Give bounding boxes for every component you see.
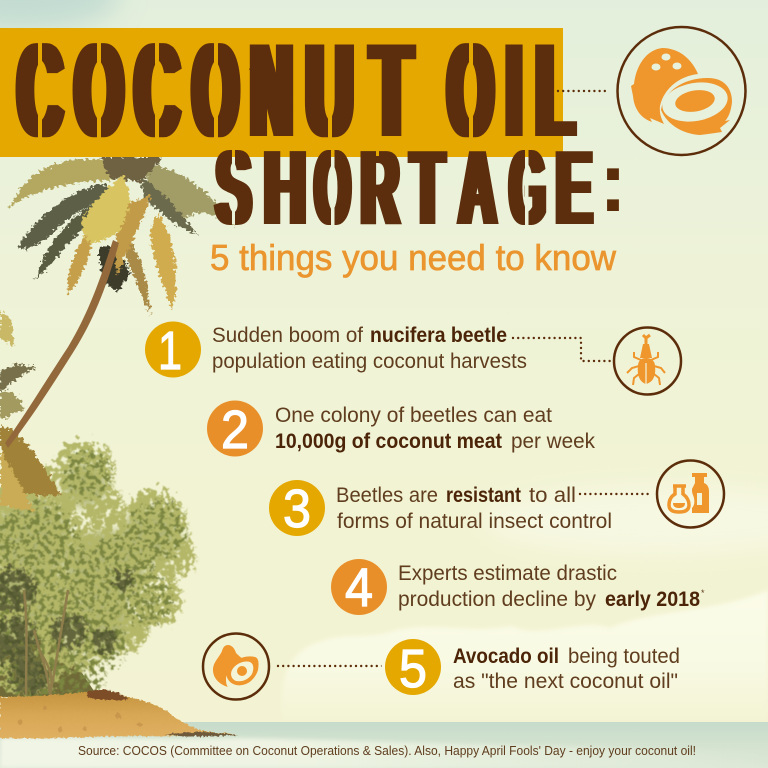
step 3 bbox=[269, 479, 612, 539]
title banner bbox=[0, 28, 563, 157]
title: COCONUT OIL: T bbox=[371, 17, 412, 165]
title: SHORTAGE: : bbox=[599, 135, 627, 229]
title: SHORTAGE: R bbox=[361, 129, 399, 247]
step 2 bbox=[207, 400, 595, 460]
connector: step 1 to beetle icon bbox=[513, 338, 612, 361]
title: COCONUT OIL: C bbox=[135, 17, 179, 165]
step 1: nucifera beetle bbox=[370, 324, 507, 347]
title: SHORTAGE: S bbox=[216, 129, 251, 247]
title: SHORTAGE: G bbox=[510, 129, 545, 247]
title: COCONUT OIL: U bbox=[306, 17, 353, 165]
step 3: Beetles are bbox=[336, 484, 438, 507]
title: SHORTAGE bbox=[214, 150, 619, 225]
icon: beetle bbox=[614, 328, 681, 394]
step 1: Sudden boom of bbox=[212, 324, 363, 347]
title: SHORTAGE: O bbox=[315, 129, 350, 247]
island cliff bbox=[0, 690, 238, 739]
step 5: 5 bbox=[399, 639, 427, 699]
step 4: * bbox=[701, 588, 705, 598]
connector: avocado icon to step 5 bbox=[278, 665, 382, 667]
title: SHORTAGE: A bbox=[459, 129, 496, 247]
small palm on left edge bbox=[0, 310, 60, 512]
title: SHORTAGE: H bbox=[264, 129, 306, 247]
text: L bbox=[536, 17, 574, 165]
step 2: per week bbox=[511, 430, 595, 453]
step 3: forms of natural insect control bbox=[337, 510, 612, 533]
step 1 bbox=[145, 321, 527, 381]
tree foliage bbox=[0, 440, 196, 705]
icon: avocado bbox=[203, 634, 269, 700]
step 1: population eating coconut harvests bbox=[212, 350, 527, 373]
icon: flask and bottle bbox=[657, 460, 724, 528]
step 2: 10,000g of coconut meat bbox=[275, 430, 502, 453]
title: SHORTAGE: E bbox=[556, 129, 592, 247]
title: COCONUT OIL: O bbox=[448, 17, 493, 165]
photo: island, tree and palm trees bbox=[0, 157, 238, 739]
title: COCONUT OIL: N bbox=[251, 17, 292, 165]
connector: title to coconut icon bbox=[558, 90, 608, 92]
step 3: to all bbox=[529, 484, 576, 507]
title: COCONUT OIL: C bbox=[18, 17, 62, 165]
step 3: resistant bbox=[446, 484, 521, 507]
step 5: being touted bbox=[568, 645, 680, 668]
title: COCONUT OIL: O bbox=[193, 17, 238, 165]
source note: Source: COCOS (Committee on Coconut Operations & Sales). Also, Happy April Fools' Day - enjoy your coconut oil! bbox=[78, 743, 696, 758]
main palm bbox=[5, 157, 235, 448]
step 5: as "the next coconut oil" bbox=[453, 670, 678, 693]
title: COCONUT OIL: I bbox=[507, 17, 521, 165]
step 4: production decline by bbox=[398, 588, 596, 611]
title: SHORTAGE: T bbox=[411, 129, 444, 247]
connector: step 3 to bottle icon bbox=[580, 493, 652, 495]
title: COCONUT OIL bbox=[16, 43, 578, 138]
icon: coconut bbox=[618, 27, 746, 155]
step 4 bbox=[331, 558, 705, 618]
subtitle: 5 things you need to know bbox=[210, 237, 617, 278]
step 4: Experts estimate drastic bbox=[398, 562, 617, 585]
step 5 bbox=[385, 639, 680, 699]
step 5: Avocado oil bbox=[453, 645, 559, 668]
step 1: 1 bbox=[158, 321, 182, 381]
title: COCONUT OIL: O bbox=[75, 17, 123, 165]
step 4: early 2018 bbox=[605, 588, 700, 611]
step 2: 2 bbox=[221, 400, 249, 460]
step 3: 3 bbox=[283, 479, 311, 539]
step 4: 4 bbox=[345, 558, 373, 618]
step 2: One colony of beetles can eat bbox=[275, 404, 552, 427]
